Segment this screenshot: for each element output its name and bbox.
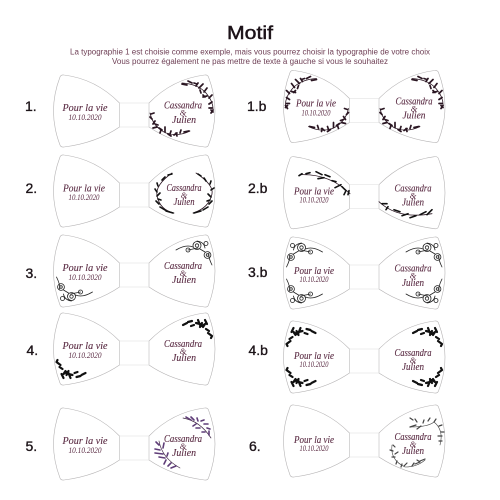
branch motif <box>299 172 432 218</box>
right text <box>164 261 202 286</box>
left text: Pour la vie <box>293 351 334 362</box>
floral wreath motif both wings <box>285 76 443 132</box>
right text: Cassandra <box>394 264 432 274</box>
bow tie 2.b <box>284 157 445 229</box>
left text: Pour la vie <box>62 263 108 274</box>
right text: & <box>410 355 417 365</box>
left text <box>293 187 334 205</box>
left text: Pour la vie <box>62 103 108 114</box>
right text <box>166 183 202 208</box>
left text <box>62 341 108 360</box>
right text <box>396 96 432 122</box>
left text <box>293 435 334 453</box>
left text: 10.10.2020 <box>300 274 329 284</box>
left text: 10.10.2020 <box>300 195 329 205</box>
thin floral wreath motif <box>390 418 444 467</box>
right text: Cassandra <box>164 100 202 112</box>
bow tie 5 <box>54 408 215 480</box>
left text: Pour la vie <box>295 98 336 110</box>
left text: 10.10.2020 <box>68 272 102 282</box>
right text: Cassandra <box>164 261 202 272</box>
right text <box>394 432 432 457</box>
bow tie 3 <box>54 235 215 307</box>
right text: Cassandra <box>396 96 432 108</box>
label 2.b: 2.b <box>248 180 268 196</box>
right text <box>164 100 202 126</box>
right text: & <box>410 270 417 280</box>
laurel motif <box>155 173 214 213</box>
right text <box>394 264 432 289</box>
left text: 10.10.2020 <box>300 359 329 369</box>
bow tie 2 <box>54 155 215 227</box>
right text: & <box>410 439 417 449</box>
left text: 10.10.2020 <box>68 112 102 122</box>
subtitle text: La typographie 1 est choisie comme exemple, mais vous pourrez choisir la typographie de votre choix <box>70 48 430 56</box>
right text: Cassandra <box>164 339 202 350</box>
scroll motif four corners <box>286 243 442 303</box>
label 3.b: 3.b <box>248 264 268 280</box>
right text: & <box>411 104 418 114</box>
right text: Julien <box>172 353 196 364</box>
left text <box>62 103 108 122</box>
bow tie 4 <box>54 313 215 385</box>
label 1.b: 1.b <box>247 98 267 114</box>
right text <box>394 348 432 373</box>
right text: Cassandra <box>394 184 432 195</box>
left text: Pour la vie <box>293 266 334 277</box>
left text: 10.10.2020 <box>68 445 102 455</box>
left text: 10.10.2020 <box>300 443 329 453</box>
label 5.: 5. <box>26 438 37 454</box>
label 4.b: 4.b <box>248 342 268 358</box>
left text <box>295 98 336 118</box>
label 1.: 1. <box>25 98 37 114</box>
bow tie 3.b <box>284 237 445 309</box>
subtitle text <box>70 48 430 66</box>
left text: 10.10.2020 <box>68 350 102 360</box>
right text: Julien <box>402 362 424 373</box>
bow tie 1.b <box>284 70 445 143</box>
right text: Julien <box>402 110 426 122</box>
right text: Cassandra <box>164 434 202 445</box>
label 2.: 2. <box>26 180 37 196</box>
right text: Cassandra <box>166 183 202 194</box>
flourish motif four corners <box>286 328 442 386</box>
title: Motif <box>227 23 274 43</box>
right text: Julien <box>402 278 424 289</box>
right text: & <box>180 346 187 356</box>
left text <box>62 263 108 282</box>
label 6.: 6. <box>249 438 261 454</box>
right text: Julien <box>402 446 424 457</box>
left text: Pour la vie <box>293 187 334 198</box>
lavender sprig motif <box>155 417 211 468</box>
right text <box>164 434 202 459</box>
right text: Cassandra <box>394 432 432 443</box>
label 4.: 4. <box>26 342 38 358</box>
bow tie 1 <box>54 75 215 147</box>
right text: & <box>181 190 188 200</box>
left text: Pour la vie <box>62 341 108 352</box>
left text <box>293 351 334 369</box>
right text: Julien <box>172 275 196 286</box>
right text: Julien <box>172 448 196 459</box>
scroll motif <box>56 241 212 301</box>
bow tie 4.b <box>284 321 445 393</box>
right text <box>394 184 432 209</box>
left text: 10.10.2020 <box>68 192 100 202</box>
left text: 10.10.2020 <box>302 108 331 118</box>
right text <box>164 339 202 364</box>
right text: & <box>180 108 187 118</box>
right text: Julien <box>174 197 194 208</box>
left text <box>62 436 108 455</box>
floral wreath motif <box>150 81 213 136</box>
right text: & <box>180 441 187 451</box>
right text: Julien <box>172 115 196 126</box>
bow tie 6 <box>284 405 445 477</box>
right text: Cassandra <box>394 348 432 359</box>
right text: & <box>180 268 187 278</box>
left text: Pour la vie <box>293 435 334 446</box>
flourish motif <box>56 320 212 378</box>
left text: Pour la vie <box>62 184 105 194</box>
right text: Julien <box>402 198 424 209</box>
right text: & <box>410 191 417 201</box>
subtitle text: Vous pourrez également ne pas mettre de texte à gauche si vous le souhaitez <box>112 57 388 66</box>
label 3.: 3. <box>26 265 37 281</box>
left text: Pour la vie <box>62 436 108 447</box>
left text <box>62 184 105 202</box>
left text <box>293 266 334 284</box>
